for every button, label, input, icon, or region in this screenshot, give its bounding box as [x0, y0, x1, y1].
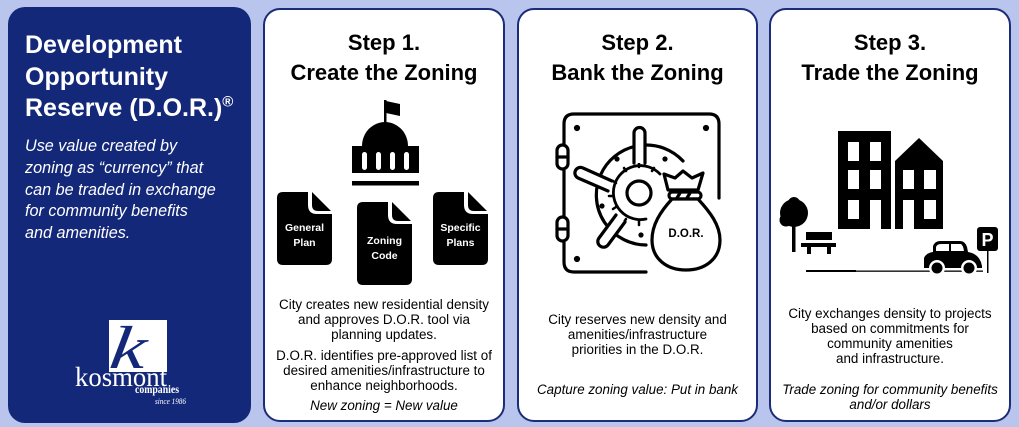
- icon: specific plans document: [433, 192, 488, 265]
- heading: step 2: Bank the Zoning: [551, 60, 724, 84]
- panel: step 3: [769, 8, 1011, 422]
- heading: step 1: Create the Zoning: [290, 60, 478, 84]
- icon: kosmont logo: companies: [135, 384, 179, 396]
- heading: step 2: [551, 30, 724, 84]
- text block: step 1 description: [279, 297, 489, 342]
- panel: step 1: [263, 8, 505, 422]
- text block: step 3 description: and infrastructure.: [836, 351, 944, 366]
- text block: step 1 detail: desired amenities/infrastructure to: [283, 362, 485, 378]
- heading: step 1: [290, 30, 478, 84]
- text block: description: Use value created by: [25, 137, 177, 155]
- text block: step 3 tagline: Trade zoning for community benefits: [782, 382, 998, 397]
- text block: step 2 tagline: Capture zoning value: Put in bank: [537, 382, 738, 396]
- text block: step 1 description: planning updates.: [331, 327, 437, 342]
- heading: panel title: Reserve (D.O.R.)®: [25, 94, 233, 122]
- icon: kosmont logo: k: [106, 315, 153, 382]
- text block: step 1 detail: [276, 348, 492, 393]
- icon: zoning code document: [357, 202, 412, 285]
- text block: step 1 description: City creates new residential density: [279, 297, 489, 312]
- text block: description: for community benefits: [25, 202, 188, 220]
- icon: general plan document: [277, 192, 332, 265]
- text block: step 3 description: based on commitments for: [811, 321, 969, 336]
- text block: step 3 description: [788, 306, 992, 366]
- icon: specific plans document: Plans: [446, 237, 475, 249]
- icon: general plan document: General: [285, 222, 324, 234]
- text block: step 3 description: community amenities: [827, 336, 953, 351]
- heading: panel title: Opportunity: [25, 62, 168, 90]
- heading: panel title: [25, 31, 234, 122]
- text block: step 3 description: City exchanges density to projects: [788, 306, 992, 321]
- icon: bank vault with money bag: [557, 114, 720, 272]
- text block: step 1 detail: enhance neighborhoods.: [310, 378, 458, 392]
- text block: step 2 description: [548, 312, 727, 357]
- icon: bank vault with money bag: D.O.R.: [668, 228, 704, 240]
- text block: description: zoning as “currency” that: [25, 159, 203, 177]
- text block: step 2 description: City reserves new density and: [548, 312, 727, 327]
- heading: step 3: [801, 30, 979, 84]
- text block: step 2 description: priorities in the D.O.R.: [572, 342, 703, 357]
- heading: step 1: Step 1.: [348, 30, 420, 54]
- text block: step 1 tagline: New zoning = New value: [310, 398, 458, 413]
- text block: step 1 detail: D.O.R. identifies pre-approved list of: [276, 348, 492, 362]
- icon: kosmont logo: kosmont: [75, 362, 167, 392]
- icon: city hall: [352, 100, 419, 186]
- icon: specific plans document: Specific: [440, 222, 481, 234]
- text block: step 3 tagline: and/or dollars: [849, 397, 931, 412]
- icon: kosmont logo: since 1986: [155, 396, 187, 406]
- text block: description: can be traded in exchange: [25, 181, 216, 199]
- icon: parking sign: [977, 227, 998, 273]
- heading: panel title: Development: [25, 31, 182, 59]
- text block: step 1 description: and approves D.O.R. tool via: [298, 312, 470, 327]
- heading: step 3: Step 3.: [854, 30, 926, 54]
- text block: step 2 description: amenities/infrastructure: [568, 327, 707, 342]
- icon: bench: [801, 232, 836, 254]
- icon: zoning code document: Code: [371, 250, 398, 262]
- icon: parking sign: P: [981, 230, 994, 250]
- icon: kosmont logo: [75, 315, 187, 406]
- text block: description: and amenities.: [25, 224, 130, 242]
- icon: house: [895, 138, 943, 229]
- ground line: [806, 270, 983, 272]
- heading: step 2: Step 2.: [601, 30, 674, 54]
- text block: description: [24, 137, 216, 242]
- panel: step 2: [517, 8, 758, 422]
- text block: step 3 tagline: [782, 382, 998, 412]
- icon: tree: [780, 197, 808, 252]
- icon: zoning code document: Zoning: [367, 235, 402, 247]
- heading: step 3: Trade the Zoning: [801, 60, 979, 84]
- panel: development opportunity reserve: [8, 7, 251, 423]
- icon: car: [924, 241, 982, 276]
- icon: general plan document: Plan: [293, 237, 316, 249]
- icon: apartment building: [838, 131, 891, 229]
